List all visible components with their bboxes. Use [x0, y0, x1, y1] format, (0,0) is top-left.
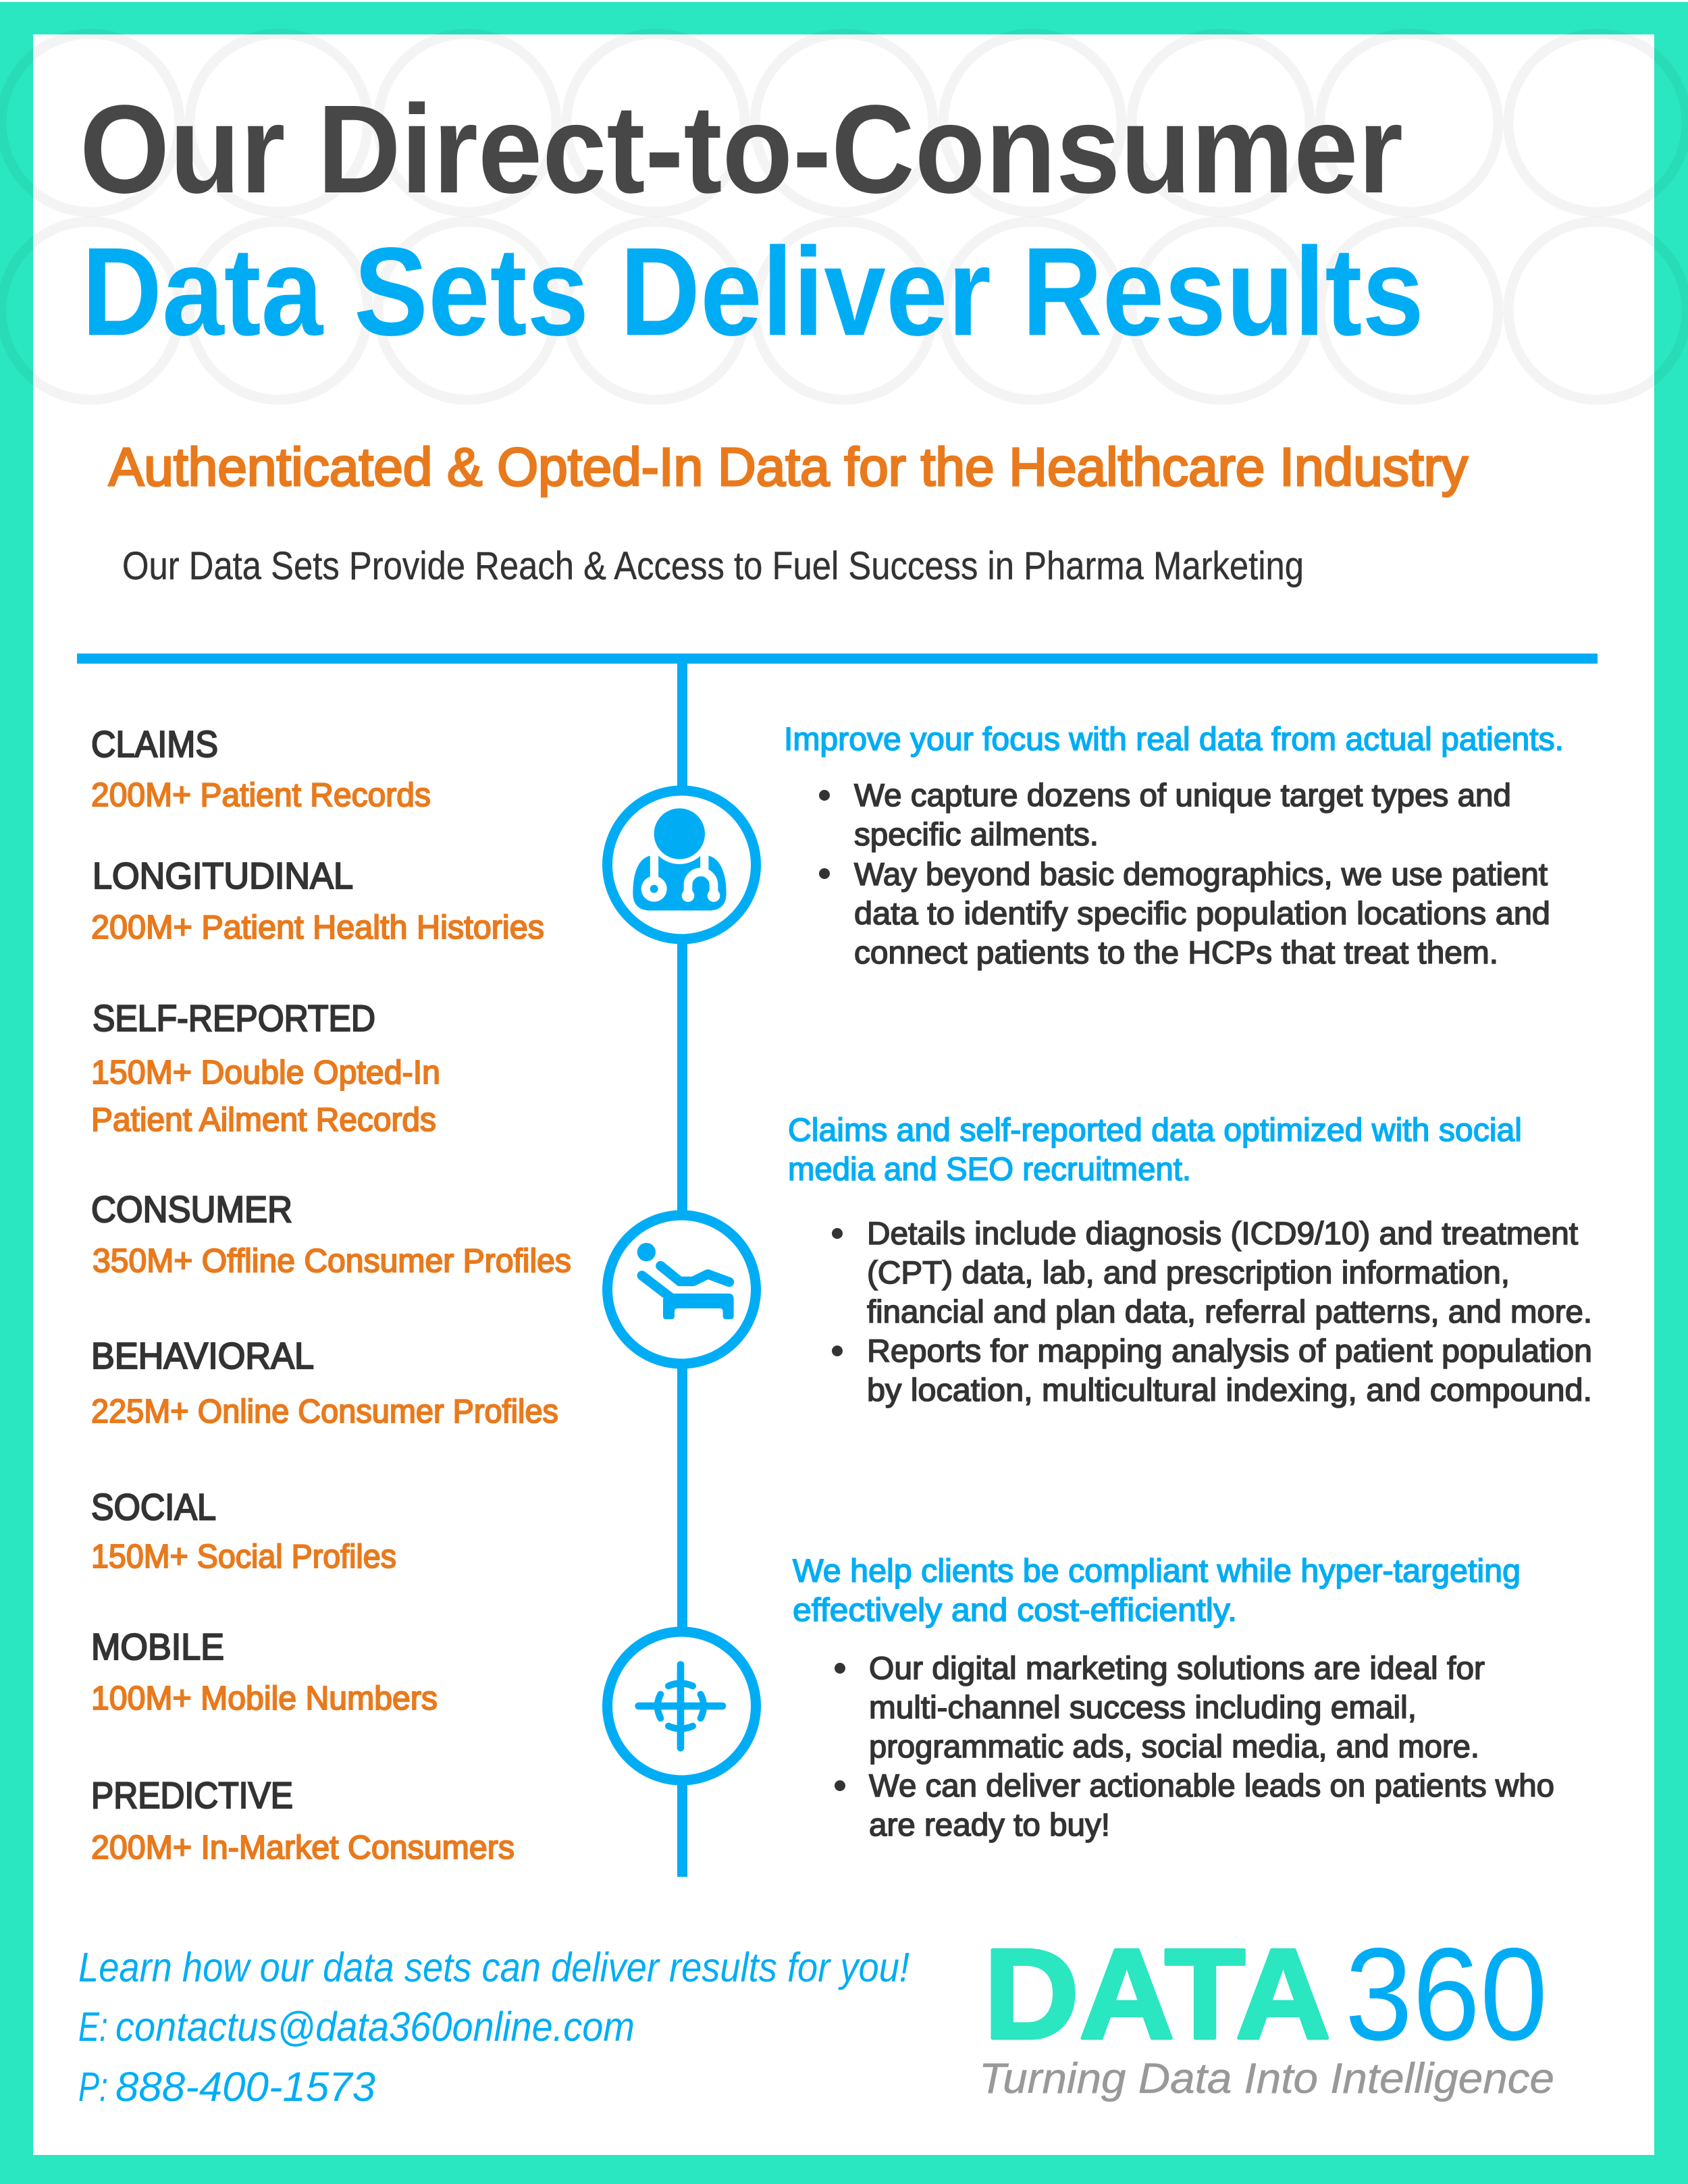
label: longitudinal: LONGITUDINAL	[93, 855, 353, 897]
label: predictive	[91, 1774, 515, 1866]
label: claims	[91, 723, 431, 814]
label: claims: 200M+ Patient Records	[91, 777, 431, 814]
subtitle: Authenticated & Opted-In Data for the Healthcare Industry	[109, 437, 1468, 497]
label: social	[91, 1486, 396, 1575]
panel: claims and self-reported data	[788, 1113, 1592, 1408]
icon: target crosshair	[608, 1632, 756, 1780]
label: mobile	[91, 1626, 438, 1717]
heading: We help clients be compliant while hyper-targeting	[793, 1553, 1521, 1589]
label: social: 150M+ Social Profiles	[91, 1539, 396, 1575]
panel: real patient data	[784, 722, 1564, 970]
heading: Improve your focus with real data from actual patients.	[784, 722, 1564, 757]
bullet list	[832, 1215, 1592, 1408]
label: claims: CLAIMS	[91, 723, 218, 765]
icon: doctor	[608, 791, 756, 939]
label: predictive: 200M+ In-Market Consumers	[91, 1830, 515, 1866]
panel: compliant hyper-targeting	[793, 1553, 1554, 1842]
label: self-reported: Patient Ailment Records	[91, 1102, 436, 1138]
label: mobile: 100M+ Mobile Numbers	[91, 1680, 438, 1717]
contact call to action: 888-400-1573	[115, 2064, 375, 2110]
bullet list: specific ailments.	[854, 816, 1099, 852]
label: behavioral: 225M+ Online Consumer Profiles	[91, 1393, 558, 1430]
icon: patient on bed	[608, 1215, 756, 1364]
contact call to action	[78, 1944, 909, 2110]
contact call to action: Learn how our data sets can deliver results for you!	[78, 1944, 909, 1990]
bullet list: Reports for mapping analysis of patient population	[867, 1333, 1592, 1368]
logo: Data360: DATA	[984, 1923, 1331, 2066]
label: predictive: PREDICTIVE	[91, 1774, 293, 1816]
background circle pattern	[1, 34, 1687, 400]
heading: Claims and self-reported data optimized with social	[788, 1113, 1522, 1148]
bullet list: (CPT) data, lab, and prescription information,	[867, 1254, 1510, 1290]
label: self-reported: 150M+ Double Opted-In	[91, 1055, 440, 1091]
heading: effectively and cost-efficiently.	[793, 1593, 1237, 1628]
heading	[788, 1113, 1522, 1188]
logo tagline: Turning Data Into Intelligence	[979, 2055, 1554, 2102]
bullet list: are ready to buy!	[869, 1807, 1110, 1842]
label: mobile: MOBILE	[91, 1626, 224, 1668]
bullet list: programmatic ads, social media, and more.	[869, 1728, 1479, 1764]
label: longitudinal: 200M+ Patient Health Histories	[91, 909, 544, 946]
bullet list: Details include diagnosis (ICD9/10) and treatment	[867, 1215, 1578, 1251]
bullet list: Way beyond basic demographics, we use patient	[854, 856, 1548, 892]
label: self-reported: SELF-REPORTED	[93, 997, 375, 1039]
label: social: SOCIAL	[91, 1486, 216, 1528]
horizontal rule	[77, 654, 1598, 664]
contact call to action: P:	[78, 2064, 108, 2110]
label: consumer: CONSUMER	[91, 1188, 292, 1230]
label: self-reported	[91, 997, 440, 1138]
label: consumer: 350M+ Offline Consumer Profiles	[93, 1243, 571, 1279]
bullet list: data to identify specific population locations and	[854, 895, 1550, 931]
bullet list	[819, 777, 1550, 970]
bullet list: multi-channel success including email,	[869, 1689, 1417, 1725]
panel: data set list	[91, 723, 571, 1866]
label: behavioral	[91, 1335, 558, 1430]
bullet list: by location, multicultural indexing, and compound.	[867, 1372, 1592, 1408]
contact call to action: E:	[78, 2004, 108, 2050]
heading	[793, 1553, 1521, 1628]
bullet list: connect patients to the HCPs that treat them.	[854, 934, 1498, 970]
bullet list: Our digital marketing solutions are ideal for	[869, 1650, 1485, 1686]
title	[80, 80, 1424, 362]
bullet list: We capture dozens of unique target types and	[854, 777, 1511, 813]
vertical timeline	[677, 663, 687, 1877]
label: consumer	[91, 1188, 571, 1279]
contact call to action: contactus@data360online.com	[115, 2004, 635, 2050]
bullet list: financial and plan data, referral patterns, and more.	[867, 1294, 1592, 1329]
bullet list: We can deliver actionable leads on patients who	[869, 1767, 1554, 1803]
heading: media and SEO recruitment.	[788, 1152, 1191, 1188]
bullet list	[835, 1650, 1554, 1842]
logo: Data360: 360	[1345, 1921, 1548, 2068]
label: behavioral: BEHAVIORAL	[91, 1335, 314, 1377]
logo: Data360	[979, 1921, 1554, 2102]
intro line: Our Data Sets Provide Reach & Access to Fuel Success in Pharma Marketing	[122, 544, 1304, 588]
title line 1: Our Direct-to-Consumer	[80, 80, 1403, 219]
title line 2: Data Sets Deliver Results	[82, 222, 1424, 362]
label: longitudinal	[91, 855, 544, 946]
